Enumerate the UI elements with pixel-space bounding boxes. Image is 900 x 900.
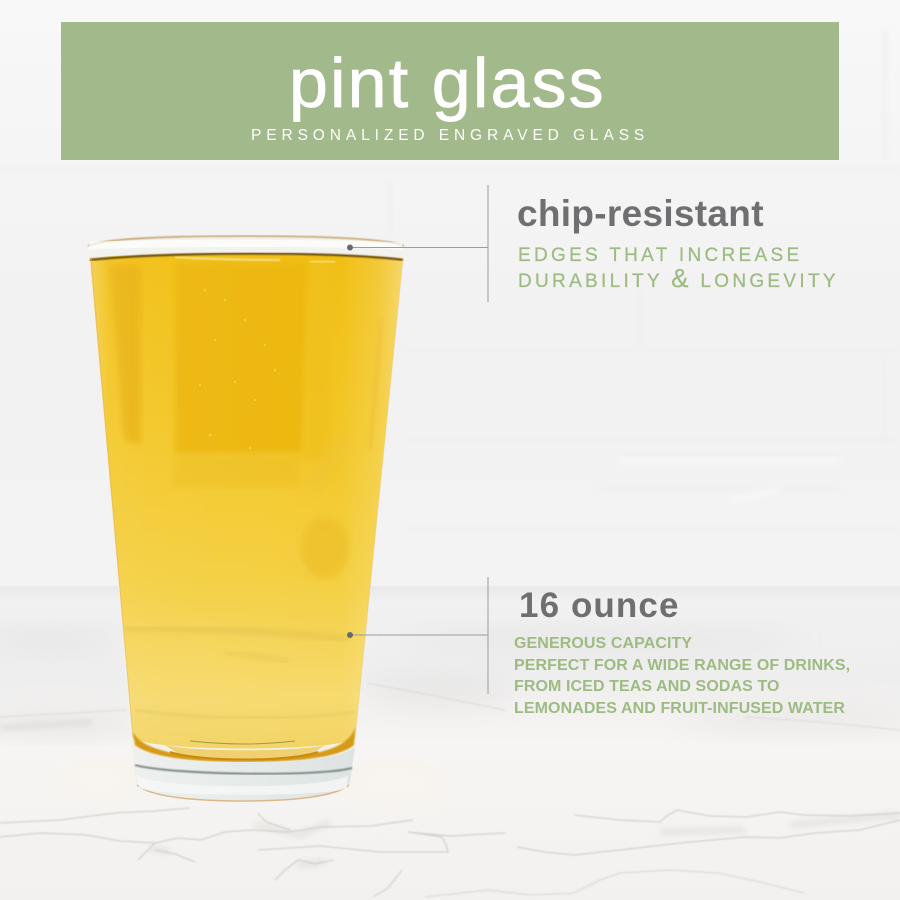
beer [90, 254, 403, 748]
description: GENEROUS CAPACITY [514, 635, 692, 652]
rim [88, 236, 404, 258]
description: DURABILITY & LONGEVITY [518, 263, 839, 293]
liquid bottom [133, 728, 355, 762]
marble veins [0, 683, 900, 897]
description [514, 635, 850, 716]
subtitle: PERSONALIZED ENGRAVED GLASS [251, 127, 649, 144]
callout: chip-resistant [347, 185, 839, 302]
title: pint glass [289, 44, 606, 122]
description: FROM ICED TEAS AND SODAS TO [514, 678, 780, 695]
heading: chip-resistant [517, 193, 764, 234]
description [518, 245, 839, 293]
glass body [88, 236, 404, 801]
leader line [347, 577, 488, 694]
callout: 16 ounce [347, 577, 850, 716]
description: LEMONADES AND FRUIT-INFUSED WATER [514, 700, 845, 716]
heading: 16 ounce [519, 586, 680, 625]
leader line [347, 185, 488, 302]
glass [88, 236, 404, 801]
bubbles [199, 289, 276, 449]
title banner [61, 22, 839, 160]
description: EDGES THAT INCREASE [518, 245, 802, 266]
marble clouds [0, 630, 900, 735]
glass base [134, 747, 355, 801]
description: PERFECT FOR A WIDE RANGE OF DRINKS, [514, 656, 850, 674]
